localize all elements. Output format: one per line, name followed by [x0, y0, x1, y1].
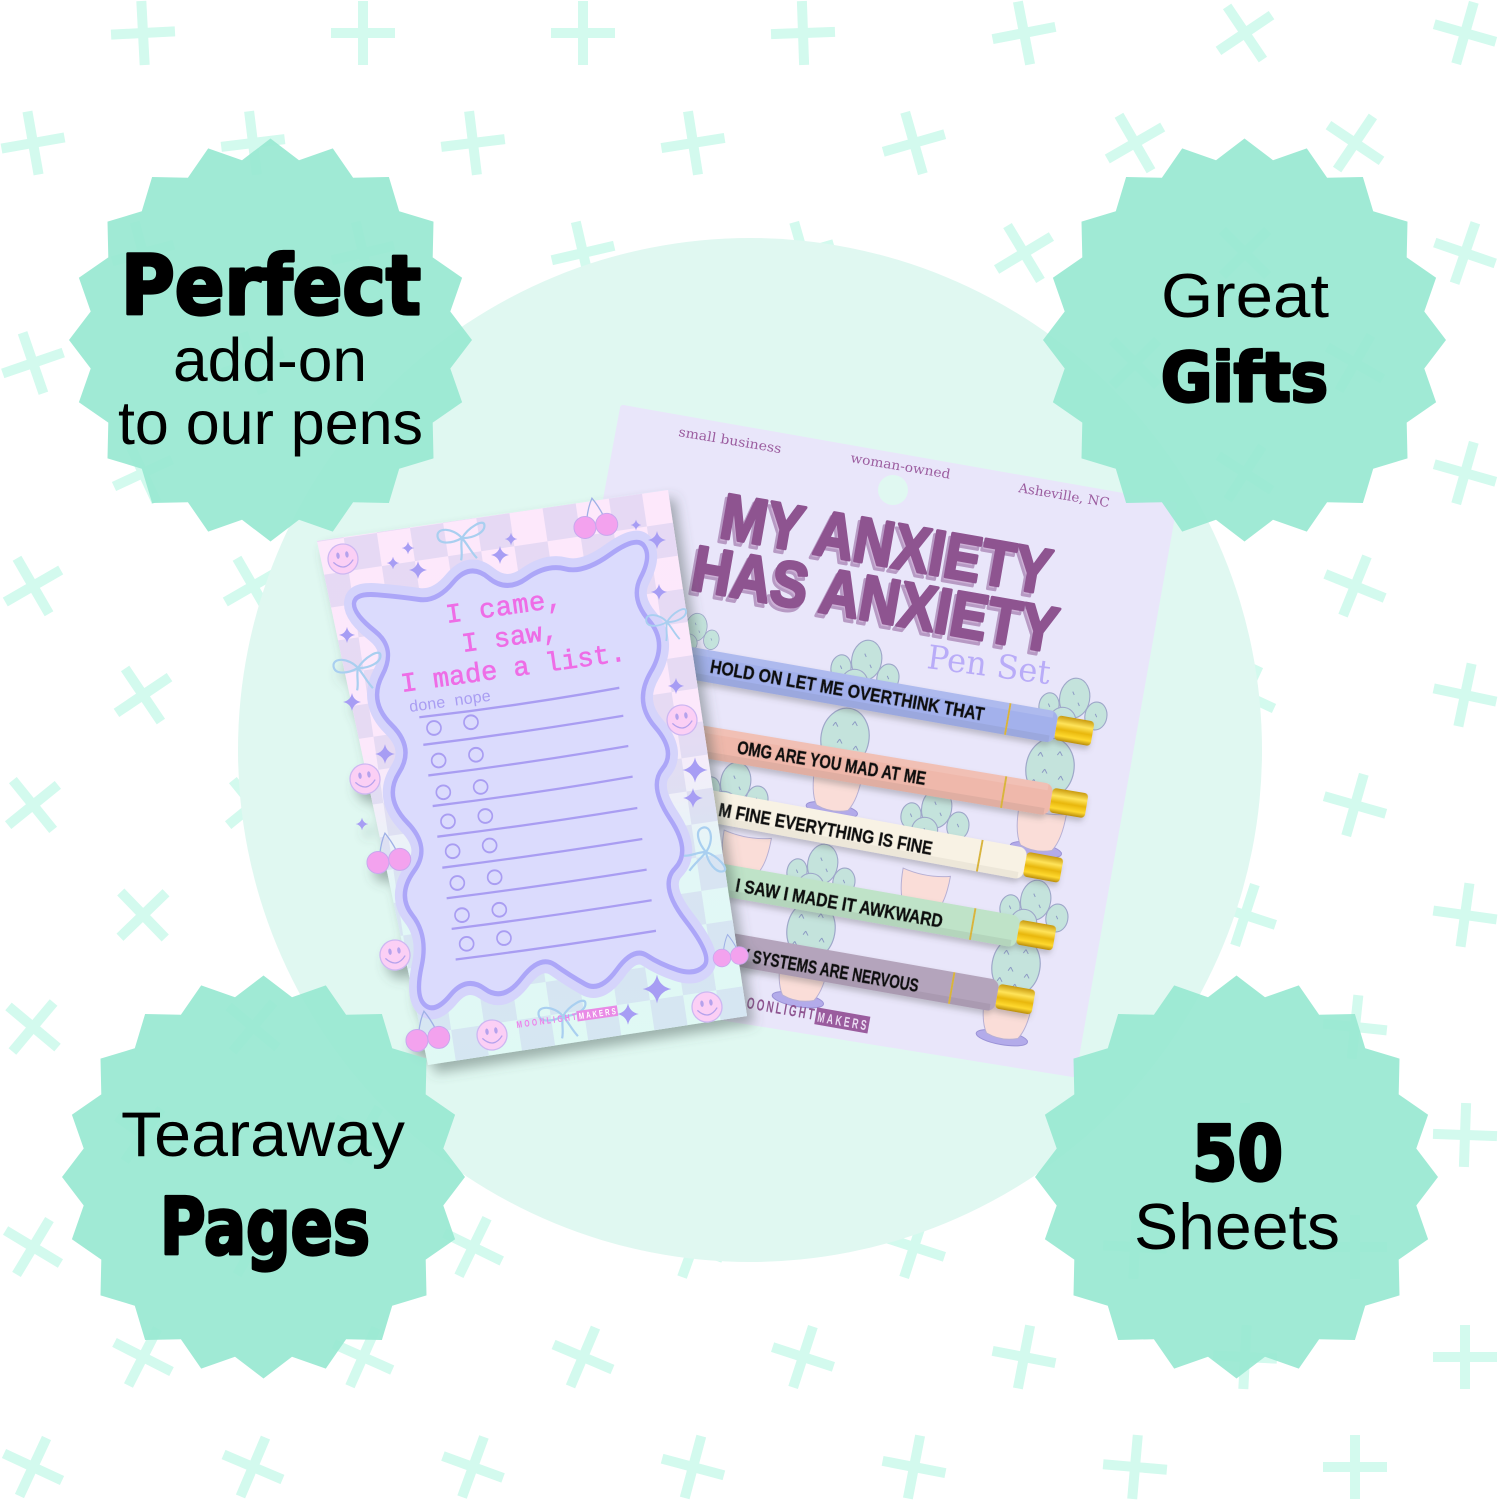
badge text: 50 [1192, 1109, 1283, 1198]
badge text: Pages [160, 1183, 370, 1273]
done / nope circles [427, 715, 511, 951]
pen 1: blue: HOLD ON LET ME OVERTHINK THAT [709, 656, 987, 725]
badge text [121, 1100, 406, 1273]
badge text: Perfect [121, 239, 421, 334]
notepad logo [516, 1005, 618, 1030]
pen 3: cream: M FINE EVERYTHING IS FINE [717, 799, 934, 859]
notepad heading [399, 586, 628, 701]
central pale mint circle [238, 238, 1262, 1262]
notepad heading: I made a list. [399, 640, 628, 701]
badge: 50 Sheets [1035, 976, 1438, 1378]
pen 2: coral [654, 718, 1089, 822]
badge text: Tearaway [121, 1100, 406, 1170]
wavy writing area [354, 542, 706, 1008]
sparkles [339, 520, 708, 1025]
card title: MY ANXIETY [713, 484, 1054, 612]
notepad logo: MOONLIGHT [516, 1012, 577, 1030]
card logo: OONLIGHT [745, 994, 816, 1023]
burst shape [1043, 138, 1446, 542]
badge: Perfect add-on to our pens [69, 138, 472, 542]
card logo: MAKERS [816, 1010, 868, 1034]
pen 5: mauve: Y SYSTEMS ARE NERVOUS [739, 944, 920, 996]
badge text [1134, 1109, 1340, 1263]
pen 3: cream [629, 776, 1064, 886]
card title [684, 480, 1063, 670]
card top labels [677, 425, 1111, 511]
badge text [1161, 262, 1329, 418]
card title: MY ANXIETY [716, 480, 1057, 608]
badge text: to our pens [118, 389, 423, 457]
checkerboard background [317, 490, 760, 1079]
card title: HAS ANXIETY [684, 536, 1060, 670]
pen 2: coral: OMG ARE YOU MAD AT ME [736, 737, 928, 789]
badge text [118, 239, 423, 457]
product: notepad [317, 490, 760, 1079]
notepad heading: I came, [444, 586, 564, 632]
burst shape [69, 138, 472, 542]
cacti illustrations [669, 609, 1113, 1049]
notepad logo: MAKERS [578, 1006, 616, 1022]
card top labels: woman-owned [849, 451, 951, 483]
card logo [745, 994, 871, 1034]
ribbon bows [333, 522, 726, 1041]
badge text: Sheets [1134, 1190, 1340, 1263]
badge text: Gifts [1161, 339, 1328, 418]
pen 4: green [621, 847, 1057, 954]
burst shape [1035, 976, 1438, 1378]
burst shape [62, 976, 465, 1378]
card top labels: Asheville, NC [1016, 481, 1111, 511]
card title: HAS ANXIETY [687, 532, 1063, 666]
pen 4: green: I SAW I MADE IT AWKWARD [734, 874, 945, 932]
pen 1: blue [659, 642, 1095, 750]
card hang hole [878, 475, 908, 505]
pen 5: mauve [600, 911, 1036, 1018]
card top labels: small business [677, 425, 782, 457]
notepad heading: I saw, [460, 618, 560, 661]
card backing [516, 408, 1174, 1074]
done nope labels: done nope [408, 688, 492, 716]
badge: Great Gifts [1043, 138, 1446, 542]
list lines [419, 688, 656, 960]
badge text: Great [1161, 262, 1329, 331]
smiley faces [326, 542, 724, 1052]
product: pen set card [516, 408, 1174, 1074]
badge text: add-on [173, 326, 367, 394]
cherries [363, 495, 749, 1053]
badge: Tearaway Pages [62, 976, 465, 1378]
Pen Set subtitle: Pen Set [925, 637, 1053, 692]
